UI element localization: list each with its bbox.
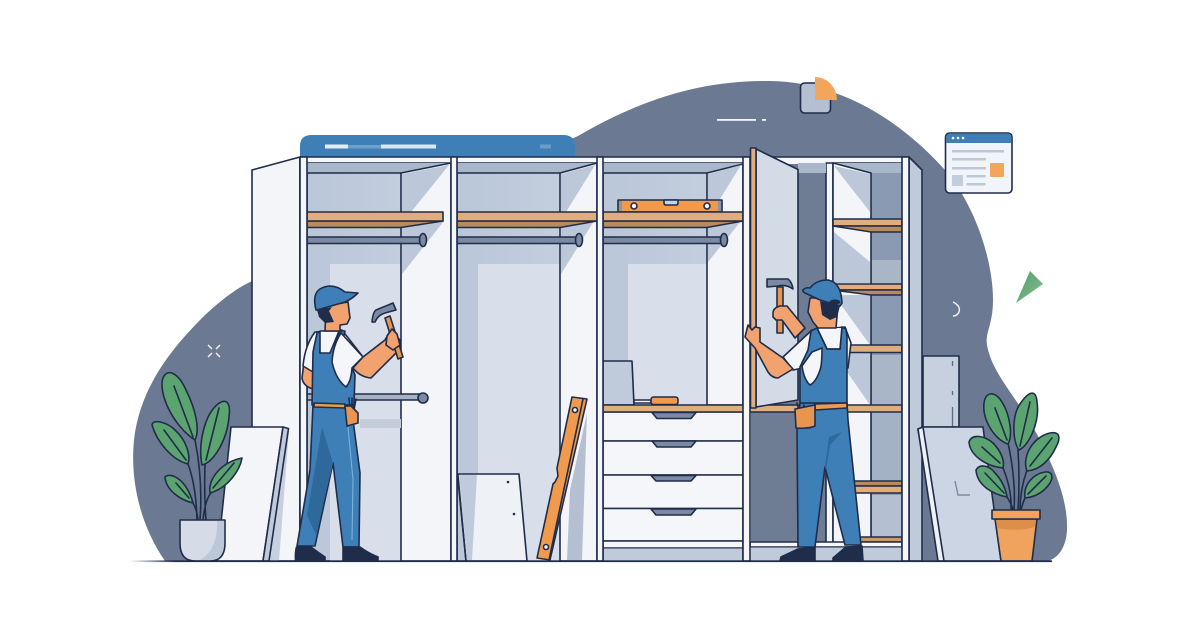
hanging rod (603, 234, 728, 246)
pot (992, 510, 1040, 561)
boots (780, 546, 863, 561)
shelf (457, 212, 597, 228)
column 3 (603, 163, 743, 561)
open section (750, 163, 902, 561)
small panel on shelf (603, 361, 634, 405)
head (803, 280, 842, 328)
column 2 (457, 163, 597, 561)
leaves (152, 373, 242, 503)
hanging rod (457, 234, 582, 246)
leaning panel left (217, 427, 289, 561)
top blue bar (300, 135, 575, 157)
left side panel (252, 157, 300, 561)
pot (180, 520, 225, 561)
hanging rod (307, 234, 426, 246)
legs (797, 403, 861, 547)
leaning spirit level (537, 397, 587, 560)
plant left (152, 373, 242, 561)
floor line (130, 560, 1052, 562)
shirt (783, 327, 851, 370)
plant right (969, 393, 1059, 561)
leaves (969, 393, 1059, 498)
overalls bib (312, 331, 363, 405)
leaning panel right (918, 427, 1001, 561)
right side panel (909, 157, 922, 561)
shelf (307, 212, 443, 228)
rear arm (302, 362, 316, 389)
hammer and forearm (767, 279, 805, 338)
back panel right (923, 356, 959, 427)
floating tile icon (800, 77, 837, 113)
green triangle (1016, 271, 1043, 303)
frame vertical bars (300, 157, 909, 561)
worker 2 (745, 279, 863, 561)
shelf (603, 212, 743, 228)
long orange shelf (603, 405, 902, 412)
head (315, 286, 358, 331)
column 1 (307, 163, 451, 561)
tool belt (795, 403, 847, 428)
stems (1003, 443, 1027, 510)
shirt (303, 330, 363, 372)
white dashes (717, 119, 766, 121)
sparkle mark (208, 345, 220, 357)
stems (188, 440, 211, 520)
crescent mark (953, 302, 959, 316)
drawers (603, 412, 743, 560)
open door (750, 148, 798, 408)
hammer (372, 303, 403, 359)
worker 1 (295, 286, 403, 561)
legs (297, 405, 360, 547)
overalls bib (800, 327, 847, 403)
spirit level on shelf (618, 200, 722, 212)
wardrobe (252, 148, 922, 561)
lower rod (307, 393, 428, 403)
screwdriver (634, 397, 678, 404)
arm (353, 331, 400, 378)
background blob (133, 81, 1067, 561)
floating browser window card (946, 133, 1012, 193)
leaning board in column 2 (458, 474, 527, 561)
right shelves (833, 219, 902, 542)
lower arm (745, 325, 793, 378)
boots (295, 547, 378, 561)
tool belt (314, 398, 358, 426)
outer frame (300, 157, 909, 561)
